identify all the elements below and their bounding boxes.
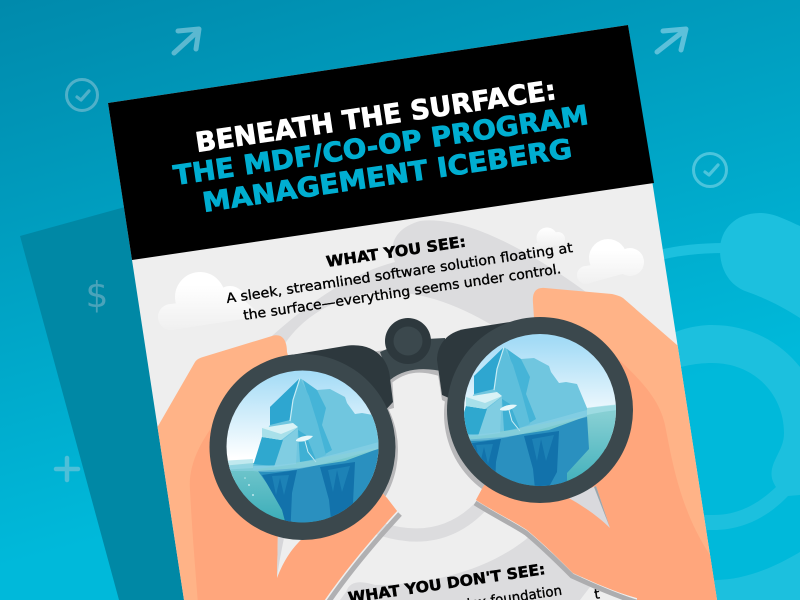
what you see body: A sleek, streamlined software solution floating at [225,240,574,307]
icon: dollar sign: $ [86,275,108,316]
notch cut left [277,536,301,578]
decorative blobs right [660,213,800,600]
hand left shade [190,410,397,600]
icon: check circle left [66,80,98,110]
title: BENEATH THE SURFACE: [193,75,558,159]
notch cut right [567,486,610,528]
binocular body left [285,345,393,460]
cloud right [577,239,644,284]
cloud small [533,228,565,250]
icon: check circle right [694,154,726,186]
page [108,25,717,600]
title: THE MDF/CO-OP PROGRAM [171,100,591,192]
what you see body: the surface—everything seems under control. [242,261,562,324]
hand right [475,288,730,600]
icon: plus [56,458,78,480]
right lens [447,317,633,503]
notch left [277,535,302,580]
cloud left [158,272,262,330]
what you see heading: WHAT YOU SEE: [325,233,467,271]
binocular body right [437,320,523,420]
binocular focus wheel [385,318,431,364]
header band [108,25,654,260]
binocular bridge [380,338,445,380]
hand right shade [476,352,730,600]
left lens [210,354,396,540]
binocular shadow [212,321,630,543]
icon: arrow left [174,29,199,53]
dark panel behind page [20,207,210,600]
icon: arrow right [657,29,686,52]
title [171,75,591,219]
notch right [570,488,610,528]
title: MANAGEMENT ICEBERG [200,134,574,219]
hand left [150,335,400,600]
page grey backdrop shapes [262,220,590,600]
